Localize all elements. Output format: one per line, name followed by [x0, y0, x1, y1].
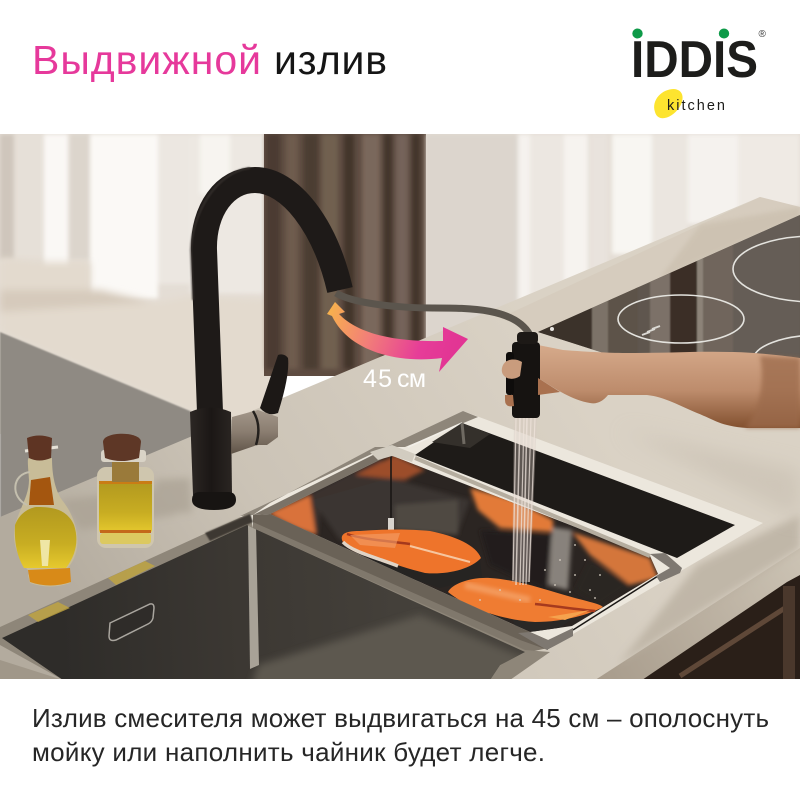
- 45 cm label: см: [397, 365, 426, 393]
- fingers: [502, 360, 522, 379]
- description text: мойку или наполнить чайник будет легче.: [32, 737, 545, 767]
- title: Выдвижной: [32, 37, 261, 83]
- faucet lever: [260, 354, 288, 414]
- left curtains and floor: [0, 134, 270, 434]
- cabinet: [642, 575, 800, 680]
- faucet: [190, 168, 340, 510]
- right sink rim and basin: [240, 411, 763, 650]
- brown curtain: [264, 134, 426, 376]
- description text: Излив смесителя может выдвигаться на 45 см – ополоснуть: [32, 703, 769, 733]
- tray left bar: [253, 454, 390, 515]
- counter front face: [595, 548, 800, 680]
- pull-out hose: [336, 293, 530, 335]
- hand and arm: [502, 332, 800, 428]
- tray front bar: [253, 514, 548, 650]
- tray reflections: [268, 455, 658, 605]
- left sink basin: [0, 513, 550, 690]
- jug cork: [27, 436, 52, 460]
- extension arrow: [327, 302, 468, 372]
- kitchen label: kitchen: [667, 98, 725, 114]
- sink rim highlights: [28, 561, 155, 622]
- title: [32, 37, 387, 83]
- faucet handle body: [231, 410, 278, 454]
- logo green dots: [632, 28, 729, 38]
- bottle shadows on counter: [60, 478, 192, 530]
- overflow slot: [109, 604, 154, 640]
- tray corner clips: [370, 445, 415, 462]
- title: излив: [274, 37, 387, 83]
- kitchen photo: [0, 134, 800, 690]
- logo wordmark: IDDIS: [631, 31, 758, 89]
- counter back shading: [760, 197, 797, 206]
- drain stem: [390, 456, 392, 522]
- rug: [0, 332, 192, 517]
- counter shadow: [618, 515, 800, 665]
- description text: [32, 703, 769, 767]
- sink rim below tray: [253, 520, 548, 653]
- registered mark: ®: [758, 29, 766, 40]
- faucet body: [190, 408, 232, 495]
- 45 cm label: [363, 365, 426, 393]
- faucet spout: [204, 180, 340, 412]
- jar cork: [103, 434, 141, 461]
- strainer tray with salmon: [253, 445, 682, 653]
- 45 cm label: 45: [363, 365, 392, 393]
- oil jar: [97, 434, 154, 548]
- spray head: [512, 342, 540, 418]
- salmon steak one: [342, 530, 481, 580]
- oil jug: [14, 436, 77, 586]
- yellow spot: [654, 89, 683, 118]
- right window curtains: [426, 134, 800, 344]
- IDDIS kitchen logo: [631, 28, 766, 118]
- countertop: [0, 197, 800, 680]
- water stream: [512, 418, 537, 585]
- salmon steak two: [448, 578, 603, 636]
- tray lines: [415, 458, 650, 556]
- induction cooktop: [538, 215, 800, 358]
- water droplets: [479, 544, 601, 601]
